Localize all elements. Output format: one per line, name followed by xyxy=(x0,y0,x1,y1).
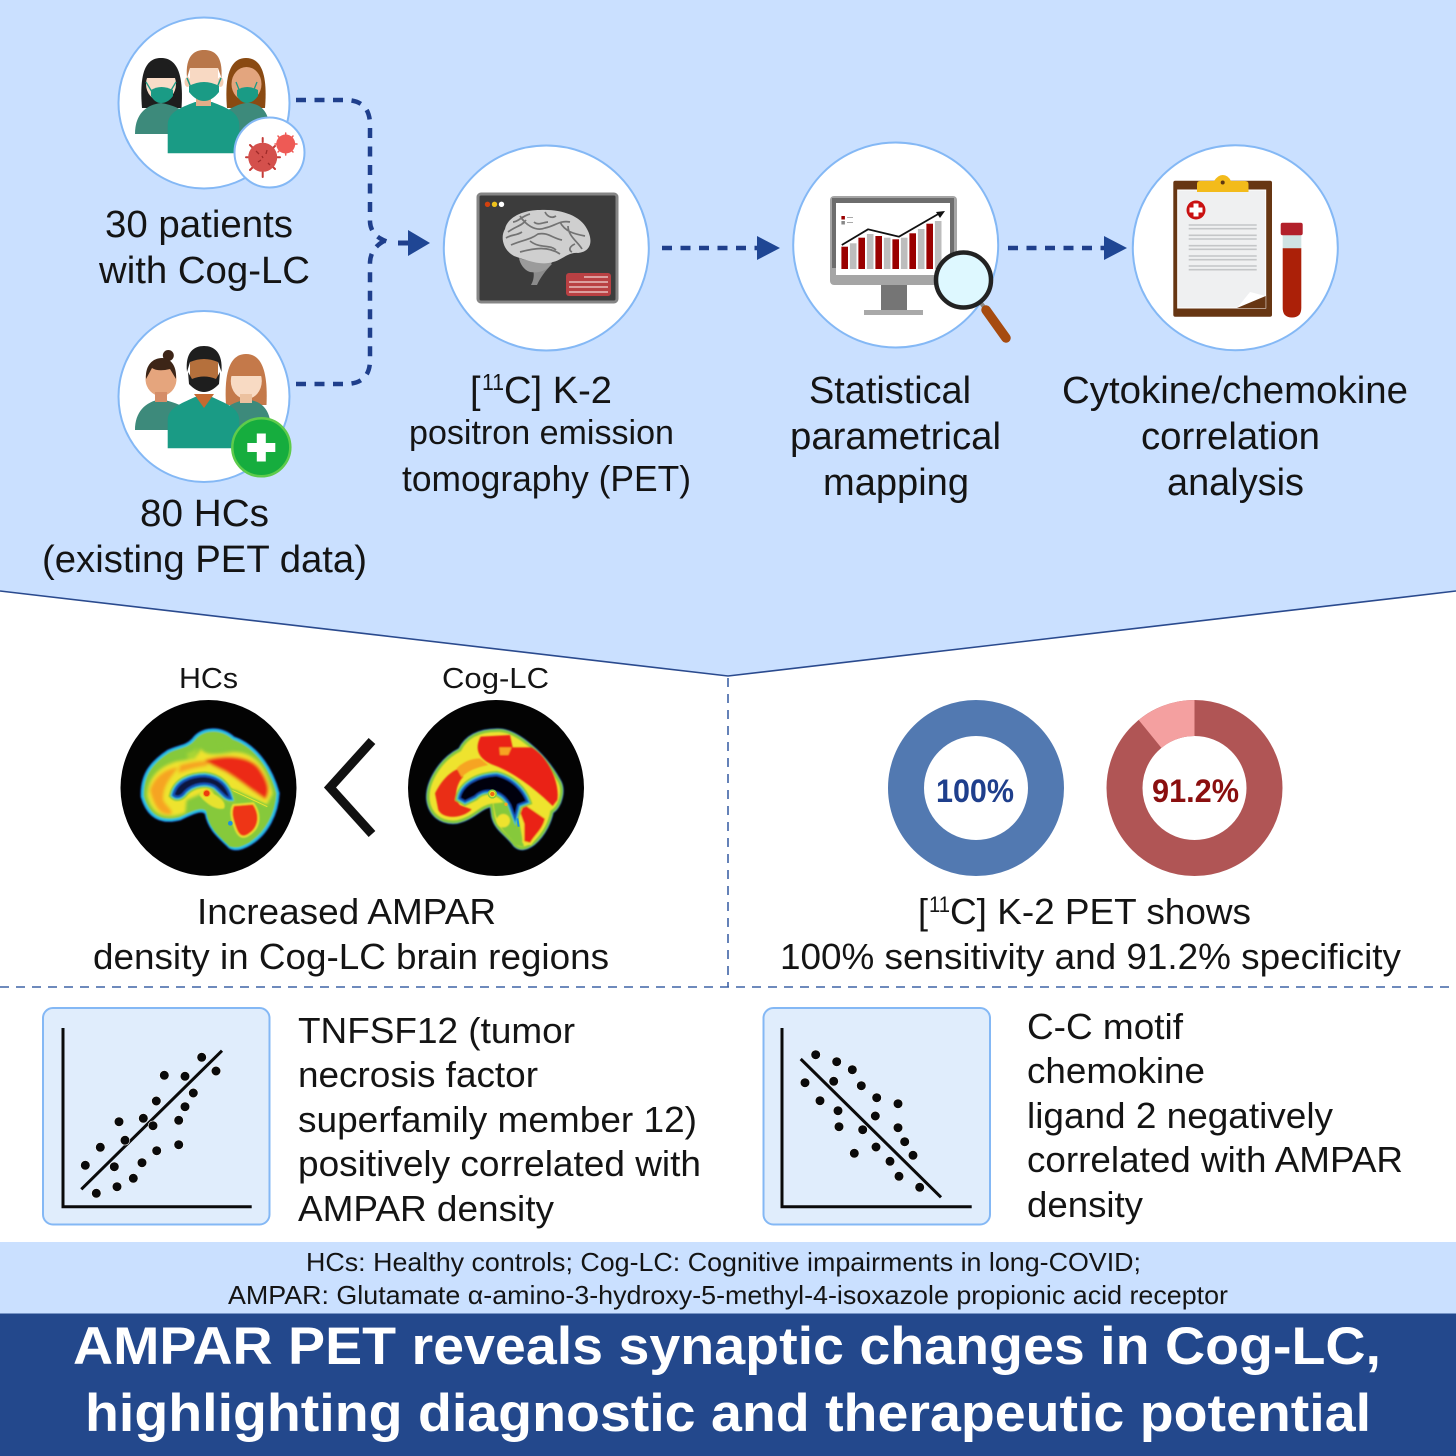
chart: sensitivity donut 100% xyxy=(906,718,1046,858)
text: patients label xyxy=(98,204,310,292)
legend: abbreviations band: HCs: Healthy controls; Cog-LC: Cognitive impairments in long-COVID; xyxy=(306,1247,1141,1277)
text: PET label xyxy=(402,369,691,499)
panel: negative correlation scatter plot xyxy=(764,1008,990,1224)
icon: PET brain scan monitor xyxy=(444,146,649,350)
text: chemokine finding: correlated with AMPAR xyxy=(1027,1139,1403,1180)
text: sensitivity finding xyxy=(780,891,1401,977)
legend: abbreviations band xyxy=(0,1242,1456,1314)
text: HCs label: 80 HCs xyxy=(140,493,269,535)
text: chemokine finding xyxy=(1027,1006,1403,1225)
legend: abbreviations band: AMPAR: Glutamate α-amino-3-hydroxy-5-methyl-4-isoxazole propionic acid receptor xyxy=(228,1280,1228,1310)
arrow: mapping to correlation xyxy=(1008,236,1127,260)
text: chemokine finding: density xyxy=(1027,1184,1143,1225)
text: TNFSF12 finding: positively correlated with xyxy=(298,1143,701,1184)
text: sensitivity finding: 11 xyxy=(929,892,950,917)
title: conclusion banner: highlighting diagnostic and therapeutic potential xyxy=(85,1384,1371,1443)
panel: positive correlation scatter plot xyxy=(43,1008,270,1224)
text: AMPAR density finding: Increased AMPAR xyxy=(197,891,496,932)
icon: plus badge xyxy=(232,418,290,476)
icon: magnifier xyxy=(936,252,1006,338)
text: mapping label xyxy=(790,370,1001,504)
text: correlation label: Cytokine/chemokine xyxy=(1062,370,1408,412)
text: TNFSF12 finding: AMPAR density xyxy=(298,1188,554,1229)
text: chemokine finding: chemokine xyxy=(1027,1050,1205,1091)
text: PET label: positron emission xyxy=(409,414,674,452)
chart: sensitivity donut 100%: 100% xyxy=(936,773,1014,809)
icon: less-than comparison xyxy=(330,741,372,834)
arrow: merging dashed connector xyxy=(296,100,430,384)
icon: clipboard and blood tube xyxy=(1133,145,1338,350)
methods background panel xyxy=(0,0,1456,676)
text: sensitivity finding: [ xyxy=(918,891,928,932)
text: HCs label: (existing PET data) xyxy=(42,539,367,581)
icon: healthy controls with plus badge xyxy=(118,311,290,482)
text: PET label: tomography (PET) xyxy=(402,458,691,499)
text: PET label: C] K-2 xyxy=(504,370,612,412)
text: chemokine finding: C-C motif xyxy=(1027,1006,1184,1047)
text: correlation label xyxy=(1062,370,1408,504)
text: TNFSF12 finding xyxy=(298,1010,701,1229)
text: patients label: 30 patients xyxy=(105,204,293,246)
text: sensitivity finding: 100% sensitivity and 91.2% specificity xyxy=(780,936,1401,977)
title: conclusion banner: AMPAR PET reveals synaptic changes in Cog-LC, xyxy=(73,1317,1381,1376)
text: correlation label: correlation xyxy=(1141,416,1320,458)
text: PET label: [ xyxy=(470,370,481,412)
text: sensitivity finding: C] K-2 PET shows xyxy=(950,891,1251,932)
arrow: PET to mapping xyxy=(662,236,780,260)
text: PET label: 11 xyxy=(482,369,504,395)
text: TNFSF12 finding: TNFSF12 (tumor xyxy=(298,1010,575,1051)
icon: virus badge xyxy=(234,118,304,188)
text: patients label: with Cog-LC xyxy=(98,250,310,292)
heading: Cog-LC: Cog-LC xyxy=(442,663,549,695)
text: mapping label: Statistical xyxy=(809,370,971,412)
chart: specificity donut 91.2%: 91.2% xyxy=(1152,773,1239,809)
icon: monitor with bar chart and magnifier xyxy=(793,142,1006,348)
text: chemokine finding: ligand 2 negatively xyxy=(1027,1095,1333,1136)
text: mapping label: mapping xyxy=(823,462,969,504)
text: mapping label: parametrical xyxy=(790,416,1001,458)
icon: masked patients with virus badge xyxy=(118,18,304,188)
chart: specificity donut 91.2% xyxy=(1124,700,1264,858)
text: HCs label xyxy=(42,493,367,581)
text: TNFSF12 finding: necrosis factor xyxy=(298,1054,538,1095)
heading: HCs: HCs xyxy=(179,663,238,695)
text: correlation label: analysis xyxy=(1167,462,1304,504)
PET scan: Cog-LC brain xyxy=(408,700,584,876)
PET scan: HCs brain xyxy=(120,700,296,876)
title: conclusion banner xyxy=(0,1314,1456,1456)
text: AMPAR density finding xyxy=(93,891,609,977)
text: TNFSF12 finding: superfamily member 12) xyxy=(298,1099,697,1140)
text: AMPAR density finding: density in Cog-LC brain regions xyxy=(93,936,609,977)
